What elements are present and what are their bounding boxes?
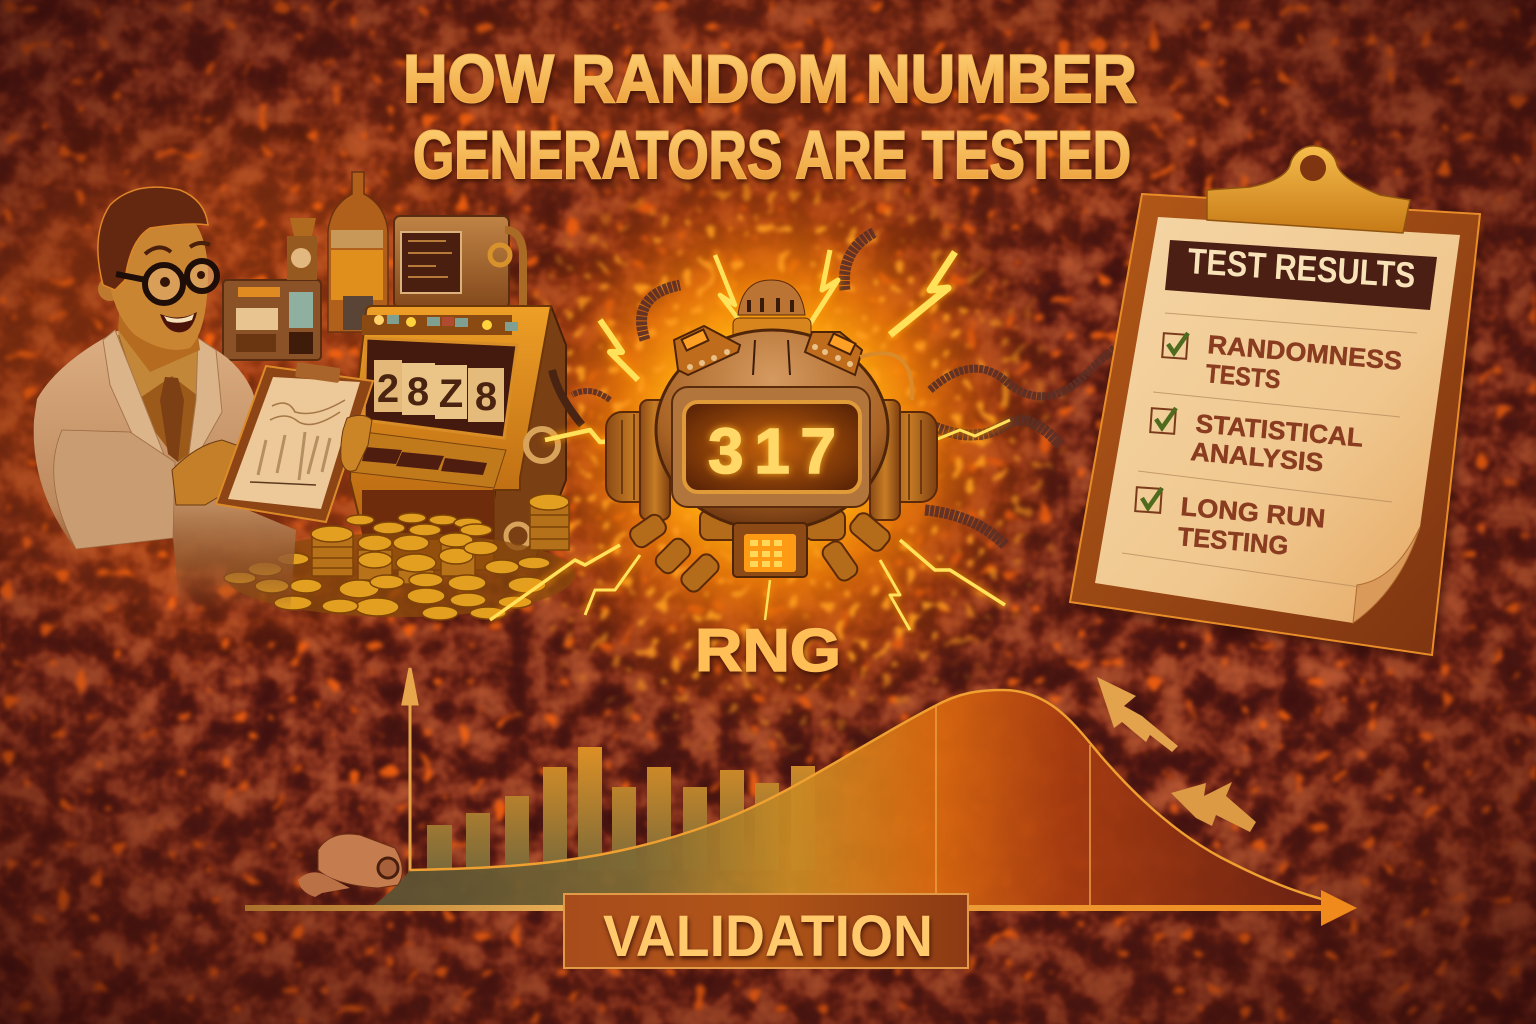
device body sphere <box>656 330 888 530</box>
slot reels: Z <box>439 372 463 416</box>
title: HOW RANDOM NUMBER <box>403 41 1137 117</box>
icon: small flask <box>287 218 317 280</box>
x axis arrowhead <box>1321 890 1357 926</box>
slot reels: 8 <box>407 370 429 414</box>
slot reels: 2 <box>377 367 399 411</box>
slot lights row <box>362 315 518 335</box>
bell curve <box>370 690 1345 908</box>
icon: upper arrow <box>1097 677 1178 752</box>
title <box>403 41 1137 193</box>
clipboard held by scientist <box>216 362 373 522</box>
coin pile <box>224 494 575 620</box>
validation label: VALIDATION <box>603 904 933 969</box>
scientist shirt and tie <box>54 330 222 549</box>
tendrils <box>572 232 1115 545</box>
checklist item: randomness tests <box>1162 329 1403 395</box>
device dome <box>733 280 811 342</box>
scientist <box>34 187 373 612</box>
checklist item: long run testing <box>1135 487 1327 561</box>
device lower claws <box>627 510 893 595</box>
clipboard paper <box>1095 217 1460 623</box>
slot reels <box>374 360 504 422</box>
checklist item: statistical analysis: STATISTICAL <box>1194 408 1365 453</box>
icon: large bottle <box>328 172 388 332</box>
slot reel window <box>364 338 517 438</box>
scientist glasses <box>116 261 217 303</box>
device shoulder plates <box>674 326 862 375</box>
scientist right hand <box>341 415 372 471</box>
energy glow behind RNG core <box>510 145 1077 762</box>
checklist item: long run testing: TESTING <box>1176 521 1290 561</box>
device cable <box>860 353 912 400</box>
histogram bars <box>427 747 815 870</box>
test results clipboard <box>1070 146 1480 655</box>
device display <box>684 402 860 492</box>
checklist item: long run testing: LONG RUN <box>1179 491 1327 534</box>
title: GENERATORS ARE TESTED <box>413 117 1131 193</box>
checklist item: statistical analysis <box>1150 408 1365 478</box>
slot reels: 8 <box>475 375 497 419</box>
slot machine <box>350 306 582 572</box>
icon: lower arrow <box>1171 782 1256 832</box>
validation banner <box>564 894 968 969</box>
checklist item: statistical analysis: ANALYSIS <box>1189 436 1325 478</box>
clipboard board <box>1070 194 1480 655</box>
RNG core device <box>606 280 937 595</box>
device side pods <box>606 400 937 520</box>
results heading bar <box>1165 240 1437 310</box>
clipboard line chart <box>270 400 345 424</box>
checklist item: randomness tests: TESTS <box>1204 358 1282 395</box>
lightning bolts <box>490 250 1010 630</box>
scientist head <box>98 187 217 372</box>
slot side knobs <box>506 370 582 548</box>
distribution chart <box>245 668 1357 926</box>
icon: small camera creature <box>298 834 402 897</box>
chart x axis <box>245 905 1325 911</box>
icon: monitor box <box>394 216 523 312</box>
RNG label: RNG <box>695 617 841 684</box>
device bezel <box>672 387 870 507</box>
device led panel <box>733 523 807 577</box>
paper rules <box>1122 313 1417 587</box>
results heading: TEST RESULTS <box>1186 240 1417 296</box>
clipboard metal clip <box>1207 146 1410 233</box>
chart y axis <box>403 668 417 872</box>
checklist item: randomness tests: RANDOMNESS <box>1206 329 1403 376</box>
icon: control panel <box>223 280 321 360</box>
slot control deck <box>350 432 506 488</box>
paper corner curl <box>1353 527 1420 623</box>
scientist lab coat <box>34 331 296 612</box>
slot coin bay <box>362 490 494 540</box>
device readout: 317 <box>708 415 836 487</box>
scientist pointing hand <box>172 440 256 505</box>
lab equipment behind slot machine <box>223 172 523 360</box>
